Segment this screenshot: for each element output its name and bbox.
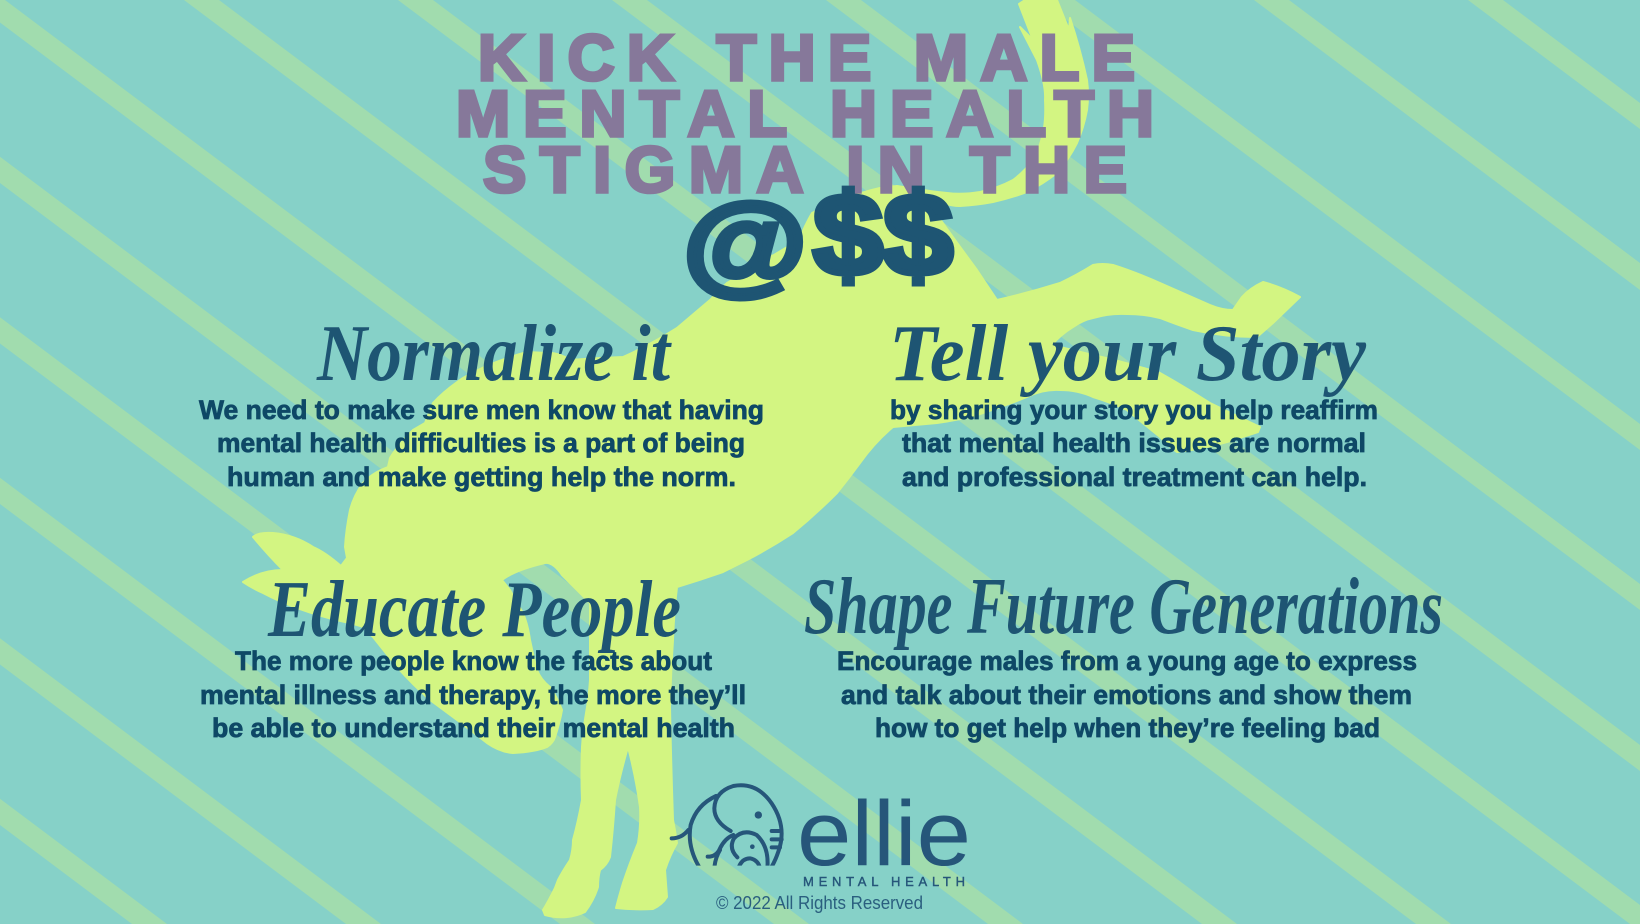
wordmark: mental health: MENTAL HEALTH (803, 874, 965, 889)
title emphasis: @$$ (683, 170, 953, 305)
donkey silhouette (243, 0, 1300, 917)
wordmark: ellie: ellie (797, 783, 971, 885)
title: MENTAL HEALTH (456, 77, 1154, 150)
text block: tell your story: and professional treatment can help. (902, 462, 1367, 492)
title emphasis: @$$: @ (683, 182, 807, 305)
text block: shape future generations (837, 646, 1417, 743)
heading: normalize it: Normalize it (316, 310, 672, 398)
text block: normalize it (199, 395, 764, 492)
panel: shape future generations (804, 563, 1443, 743)
panel: educate people (200, 566, 746, 743)
heading: educate people: Educate People (267, 566, 681, 654)
title: STIGMA IN THE (483, 133, 1127, 206)
title (456, 21, 1154, 206)
icon: elephant and calf (672, 785, 782, 868)
panel: normalize it (199, 310, 764, 492)
copyright: © 2022 All Rights Reserved (716, 893, 923, 913)
text block: tell your story: that mental health issues are normal (902, 428, 1366, 458)
heading: tell your story: Tell your Story (889, 310, 1366, 398)
logo: ellie mental health (672, 783, 971, 889)
text block: shape future generations: how to get help when they’re feeling bad (875, 713, 1380, 743)
text block: educate people: The more people know the facts about (235, 646, 712, 676)
panel: tell your story (889, 310, 1378, 492)
text block: tell your story (890, 395, 1378, 492)
text block: shape future generations: and talk about their emotions and show them (841, 680, 1412, 710)
text block: educate people: be able to understand their mental health (212, 713, 735, 743)
text block: normalize it: mental health difficulties is a part of being (217, 428, 745, 458)
title emphasis: @$$: $$ (813, 170, 953, 300)
text block: tell your story: by sharing your story you help reaffirm (890, 395, 1378, 425)
text block: normalize it: We need to make sure men know that having (199, 395, 764, 425)
text block: shape future generations: Encourage males from a young age to express (837, 646, 1417, 676)
text block: educate people (200, 646, 746, 743)
title: KICK THE MALE (478, 21, 1135, 94)
text block: educate people: mental illness and therapy, the more they’ll (200, 680, 746, 710)
text block: normalize it: human and make getting help the norm. (227, 462, 736, 492)
